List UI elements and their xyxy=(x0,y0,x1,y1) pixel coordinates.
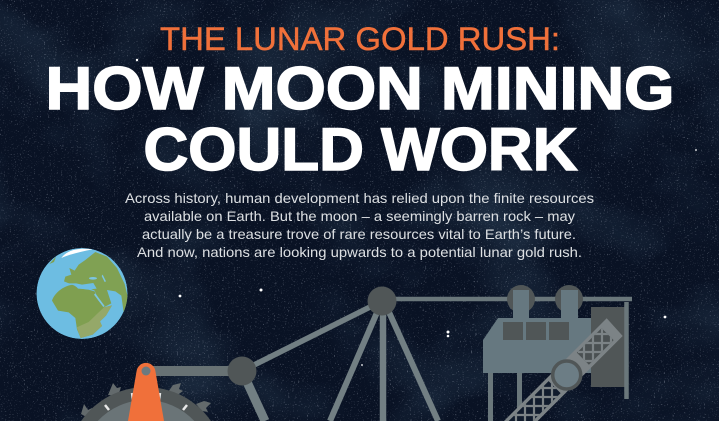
intro text block: Across history, human development has relied upon the finite resources xyxy=(125,190,594,206)
mining wheel xyxy=(81,383,211,421)
plant legs xyxy=(488,373,493,421)
intro text block xyxy=(125,190,594,260)
intro text block: available on Earth. But the moon – a seemingly barren rock – may xyxy=(144,208,575,224)
mining machine: support frame xyxy=(146,286,632,421)
intro text block: And now, nations are looking upwards to a potential lunar gold rush. xyxy=(137,244,582,260)
ring pulley xyxy=(553,361,581,389)
heading: how moon mining: HOW MOON MINING xyxy=(46,55,674,122)
rear panel xyxy=(591,307,625,387)
conveyor lattice xyxy=(500,318,623,421)
wheels xyxy=(507,285,535,313)
heading: could work: COULD WORK xyxy=(144,116,578,183)
processing plant xyxy=(483,285,626,421)
icon: earth globe xyxy=(36,248,129,339)
windows xyxy=(503,322,523,340)
hoppers xyxy=(513,290,529,319)
orange arm xyxy=(128,363,164,421)
joint xyxy=(368,286,396,316)
joint xyxy=(228,356,256,386)
title: the lunar gold rush: THE LUNAR GOLD RUSH: xyxy=(160,21,560,57)
intro text block: actually be a treasure trove of rare resources vital to Earth’s future. xyxy=(142,226,576,242)
plant body xyxy=(483,318,591,373)
